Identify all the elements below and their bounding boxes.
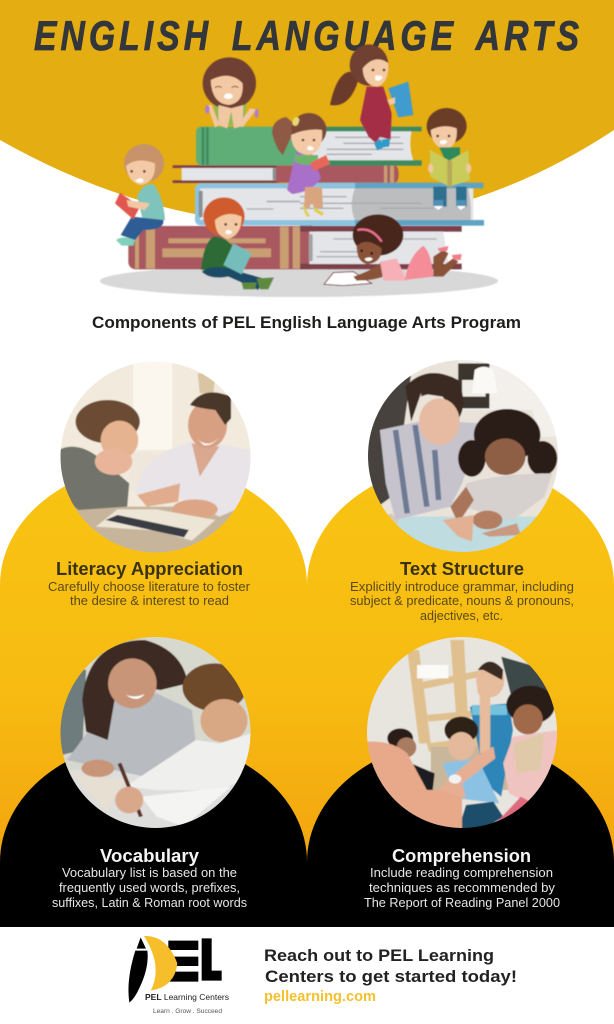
red book xyxy=(310,155,330,171)
body: literacy appreciation xyxy=(48,579,251,608)
body: comprehension: The Report of Reading Panel 2000 xyxy=(364,895,560,910)
body: text structure: Explicitly introduce grammar, including xyxy=(350,579,574,594)
collar xyxy=(295,155,318,165)
body: literacy appreciation: Carefully choose literature to foster xyxy=(48,579,251,594)
legs xyxy=(304,187,323,208)
photo: father and son reading xyxy=(60,362,250,552)
logo name: PEL Learning Centers xyxy=(145,992,229,1002)
black arch panels xyxy=(0,740,614,927)
child: girl in purple dress xyxy=(272,113,330,217)
body: text structure: subject & predicate, nouns & pronouns, xyxy=(350,593,574,608)
panel: comprehension xyxy=(364,633,568,910)
section heading: Components of PEL English Language Arts Program xyxy=(92,313,521,332)
body: vocabulary xyxy=(52,865,247,910)
child: red-haired boy xyxy=(201,197,274,290)
book stack xyxy=(128,127,484,269)
hair clip xyxy=(291,116,300,127)
header gold arc xyxy=(0,0,614,225)
heading: vocabulary: Vocabulary xyxy=(100,846,199,866)
photo: mother and child writing xyxy=(60,637,250,828)
heading: literacy appreciation: Literacy Appreciation xyxy=(56,559,243,579)
body: vocabulary: frequently used words, prefixes, xyxy=(59,880,240,895)
dress xyxy=(287,152,321,194)
child: ponytail girl in red xyxy=(330,44,413,151)
call to action: Centers to get started today! xyxy=(265,967,517,986)
photo: children raising hands in class xyxy=(367,637,557,828)
body: comprehension: Include reading comprehension xyxy=(370,865,553,880)
panel: text structure xyxy=(350,357,574,623)
body: comprehension: techniques as recommended by xyxy=(369,880,555,895)
heading: comprehension: Comprehension xyxy=(392,846,531,866)
call to action: Reach out to PEL Learning xyxy=(264,946,494,965)
call to action xyxy=(264,946,517,1005)
child: top centre girl xyxy=(203,57,259,128)
body: text structure xyxy=(350,579,574,623)
body: literacy appreciation: the desire & interest to read xyxy=(70,593,229,608)
illustration: children reading on stacked books xyxy=(100,44,498,297)
child: girl lying down with open book xyxy=(324,214,462,286)
body: comprehension xyxy=(364,865,560,910)
body: vocabulary: Vocabulary list is based on the xyxy=(62,865,237,880)
shoes xyxy=(303,204,324,217)
panel: literacy appreciation xyxy=(48,357,258,608)
ponytail xyxy=(272,117,296,155)
head xyxy=(292,113,326,147)
website link: pellearning.com xyxy=(264,989,376,1005)
heading: text structure: Text Structure xyxy=(400,559,524,579)
child: boy with yellow book xyxy=(427,108,471,210)
body: vocabulary: suffixes, Latin & Roman root words xyxy=(52,895,247,910)
panel: vocabulary xyxy=(52,633,258,910)
logo: PEL Learning Centers xyxy=(128,936,229,1015)
child: left boy with red book xyxy=(115,144,165,246)
body: text structure: adjectives, etc. xyxy=(420,608,503,623)
photo: mother and daughter at table xyxy=(368,360,558,552)
yellow arch panels xyxy=(0,464,614,870)
logo tagline: Learn . Grow . Succeed xyxy=(153,1008,222,1015)
ground shadow xyxy=(100,265,498,297)
